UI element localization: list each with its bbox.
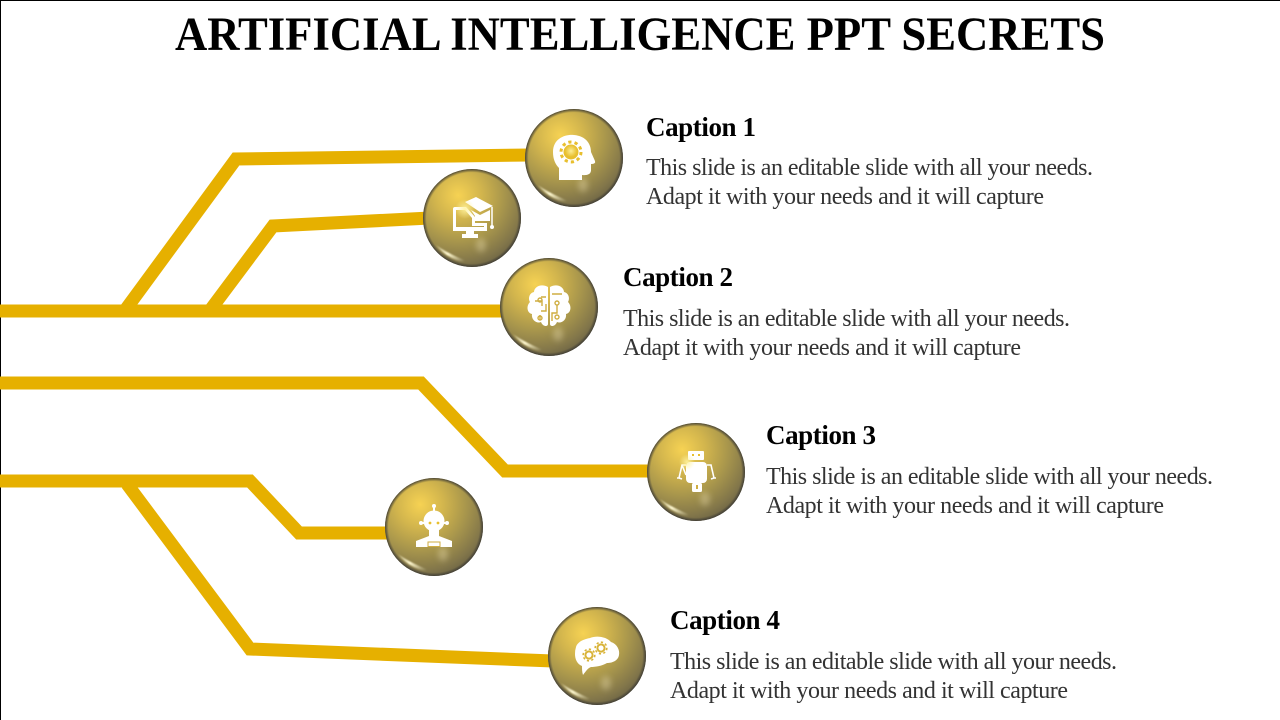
- caption 1: Caption 1: [646, 112, 756, 142]
- line: trunk to caption 2: [0, 304, 505, 318]
- icon: robot: [677, 451, 716, 492]
- caption 4: This slide is an editable slide with all your needs.: [670, 649, 1117, 675]
- line: branch to graduation icon: [211, 218, 430, 309]
- icon: android avatar: [416, 504, 452, 547]
- line: to robot head icon: [0, 481, 392, 533]
- caption 2: Adapt it with your needs and it will capture: [623, 335, 1021, 361]
- icon: head and gear: [553, 135, 595, 180]
- sphere: head with gear: [525, 109, 623, 207]
- caption 4: [670, 605, 1117, 704]
- line: to caption 3: [0, 383, 652, 471]
- caption 3: [766, 420, 1213, 519]
- connector lines: [0, 155, 652, 661]
- caption 3: Adapt it with your needs and it will capture: [766, 493, 1164, 519]
- line: branch to caption 4: [127, 484, 553, 661]
- icon: brain with gears: [575, 637, 619, 675]
- icon: monitor and cap: [453, 197, 494, 238]
- sphere: monitor with graduation cap: [423, 169, 521, 267]
- caption 1: This slide is an editable slide with all your needs.: [646, 155, 1093, 181]
- icon: circuit brain: [528, 285, 570, 326]
- sphere: robot: [647, 423, 745, 521]
- caption 4: Caption 4: [670, 605, 780, 635]
- sphere: circuit brain: [500, 258, 598, 356]
- caption 3: Caption 3: [766, 420, 876, 450]
- caption 2: Caption 2: [623, 262, 733, 292]
- caption 4: Adapt it with your needs and it will capture: [670, 678, 1068, 704]
- caption 3: This slide is an editable slide with all your needs.: [766, 464, 1213, 490]
- caption 2: This slide is an editable slide with all your needs.: [623, 306, 1070, 332]
- line: branch to caption 1: [126, 155, 530, 309]
- caption 1: [646, 112, 1093, 210]
- title: ARTIFICIAL INTELLIGENCE PPT SECRETS: [175, 8, 1105, 61]
- sphere: brain with gears: [548, 607, 646, 705]
- caption 1: Adapt it with your needs and it will capture: [646, 184, 1044, 210]
- sphere: robot head and shoulders: [385, 478, 483, 576]
- caption 2: [623, 262, 1070, 361]
